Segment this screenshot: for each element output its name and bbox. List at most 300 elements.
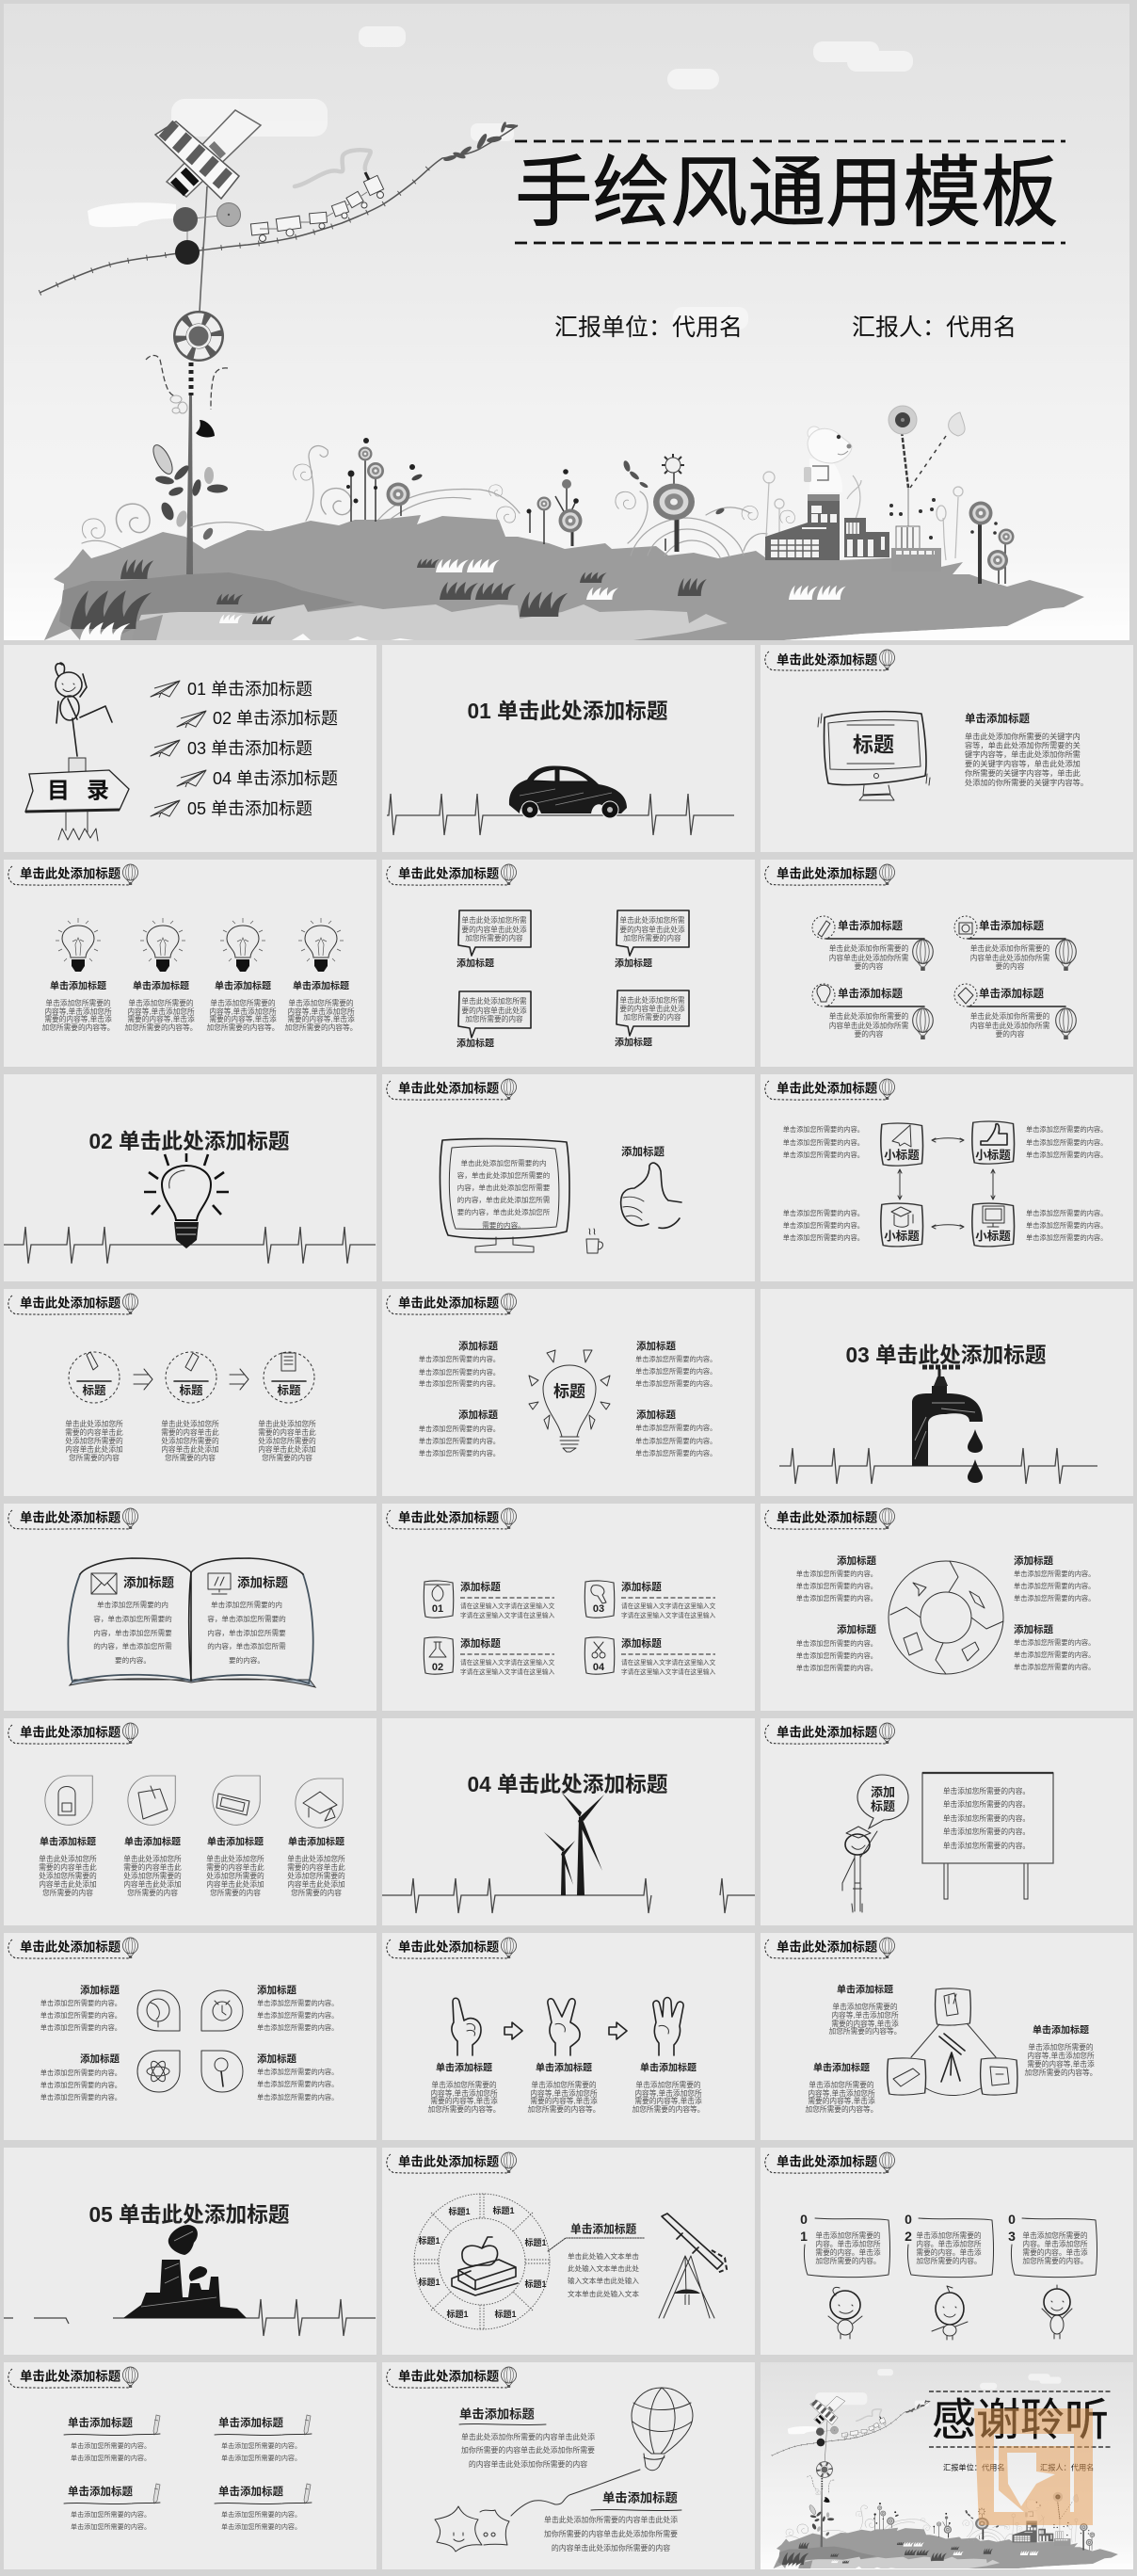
bulb column 4: 单击添加标题 [293, 979, 349, 992]
card: graduation cap: 单击添加您所需要的内容。 [783, 1233, 864, 1241]
item 01: 字请在这里输入文字请在这里输入 [460, 1610, 555, 1619]
top right text: 单击添加您所需要的内容。 [635, 1378, 716, 1388]
slide heading: 单击此处添加标题 [398, 1510, 500, 1525]
item: diamond: 单击添加标题 [979, 987, 1044, 1000]
item: note paper [123, 1776, 182, 1896]
step 1: 处添加您所需要的 [65, 1435, 123, 1444]
item: camera: 单击添加标题 [979, 919, 1044, 932]
item: graduation cap: 处添加您所需要的 [287, 1870, 345, 1879]
item: backpack [39, 1776, 97, 1896]
icon: coffee cup [586, 1229, 602, 1253]
item: pencil: 要的内容 [855, 960, 884, 970]
step 2: 内容单击此处添加 [161, 1444, 219, 1454]
icon: monitor with text: 要的内容，单击此处添加您所 [457, 1207, 551, 1216]
cover title: 手绘风通用模板 [515, 150, 1058, 236]
bulb column 4 [285, 918, 357, 1032]
item: camera: 要的内容 [996, 960, 1025, 970]
notice board: 单击添加您所需要的内容。 [943, 1840, 1030, 1849]
speech box 1: 加您所需要的内容 [465, 932, 523, 942]
left page text: 容，单击添加您所需要的 [93, 1614, 172, 1623]
block top left: 单击添加您所需要的内容。 [71, 2441, 151, 2450]
bulb column 1: 内容等,单击添加您所 [44, 1006, 112, 1015]
icon: bulb with label: 标题 [553, 1382, 585, 1401]
item 02 [424, 1637, 555, 1676]
slide heading: 单击此处添加标题 [777, 1725, 878, 1740]
segment labels: 标题1 [492, 2205, 515, 2215]
body text: 容等，单击此处添加你所需要的关 [965, 740, 1081, 749]
panel: teacher and board [761, 1718, 1133, 1925]
card: monitor: 单击添加您所需要的内容。 [1026, 1233, 1107, 1241]
header badge [765, 2152, 894, 2173]
left page text: 的内容，单击添加您所需 [93, 1640, 172, 1650]
note 3 with kid: 0 [1008, 2212, 1016, 2227]
note 2 with kid [905, 2212, 994, 2340]
block bottom left: 单击添加标题 [68, 2485, 133, 2498]
panel: circular diagram [761, 1504, 1133, 1711]
text block left: 单击添加您所需要的 [809, 2079, 874, 2088]
watermark logo [974, 2408, 1093, 2525]
icon: faucet [912, 1367, 983, 1466]
hand three: 单击添加标题 [640, 2062, 697, 2073]
speech box 3: 添加标题 [456, 1038, 494, 1049]
speech box 4: 要的内容单击此处添 [619, 1004, 685, 1013]
note 1 with kid: 内容。单击添加您所 [815, 2239, 881, 2248]
chart: dotted ring of eight segments [414, 2194, 550, 2329]
note 3 with kid: 单击添加您所需要的 [1022, 2230, 1088, 2239]
item: bulb: 要的内容 [855, 1028, 884, 1038]
panel: numbered cards [382, 1504, 755, 1711]
upper text block: 单击添加标题 [459, 2407, 535, 2422]
top right text: 添加标题 [257, 1984, 296, 1996]
icon: telescope [939, 2034, 965, 2082]
panel: four bulbs [4, 860, 376, 1067]
item 02: 02 [432, 1662, 443, 1673]
icon: apple on books [452, 2237, 518, 2295]
text block top: 需要的内容等,单击添 [831, 2019, 899, 2028]
speech box 3: 单击此处添加您所需 [461, 996, 527, 1006]
item: ruler tag [206, 1776, 264, 1896]
list item 02: 02 单击添加标题 [213, 709, 338, 728]
panel: four circle icons [4, 1933, 376, 2140]
block bottom right [215, 2484, 312, 2531]
note 2 with kid: 2 [905, 2229, 912, 2244]
item: pencil: 内容单击此处添加你所需 [829, 953, 909, 962]
bottom right text: 单击添加您所需要的内容。 [257, 2068, 338, 2075]
item 01: 添加标题 [460, 1581, 501, 1593]
icon: monitor [818, 712, 930, 800]
list item 01: 01 单击添加标题 [187, 680, 312, 699]
lower text block: 单击此处添加你所需要的内容单击此处添 [544, 2514, 678, 2523]
step 3 [258, 1352, 316, 1461]
bottom left text: 单击添加您所需要的内容。 [796, 1638, 877, 1648]
step 3: 单击此处添加您所 [258, 1418, 316, 1427]
header badge [8, 1508, 137, 1529]
header badge [765, 1938, 894, 1958]
bottom right text: 单击添加您所需要的内容。 [257, 2079, 338, 2088]
hand three: 单击添加您所需要的 [635, 2079, 701, 2088]
body text: 你所需要的关键字内容等，单击此 [965, 768, 1081, 778]
note 3 with kid [1008, 2212, 1097, 2339]
speech box 4: 单击此处添加您所需 [619, 994, 685, 1004]
item: pencil: 单击添加标题 [838, 919, 903, 932]
bottom left text: 添加标题 [458, 1409, 498, 1421]
top left text: 单击添加您所需要的内容。 [419, 1367, 500, 1377]
card: paper plane: 小标题 [884, 1148, 920, 1162]
panel: contents slide [4, 645, 376, 852]
header badge [765, 1079, 894, 1100]
panel: balloons list [761, 860, 1133, 1067]
bottom left text: 单击添加您所需要的内容。 [796, 1663, 877, 1672]
item: diamond: 要的内容 [996, 1028, 1025, 1038]
card: book [888, 2058, 926, 2095]
card: binder clips [936, 1988, 970, 2025]
header badge [387, 864, 516, 885]
bottom left text: 单击添加您所需要的内容。 [40, 2068, 121, 2077]
header badge [765, 864, 894, 885]
bottom left text: 添加标题 [837, 1623, 876, 1635]
note 3 with kid: 内容。单击添加您所 [1022, 2239, 1088, 2248]
item: graduation cap [287, 1779, 345, 1896]
reporter: 汇报人：代用名 [1040, 2463, 1094, 2472]
bottom left text: 单击添加您所需要的内容。 [419, 1437, 500, 1444]
icon shape: atom [137, 2051, 180, 2092]
item: note paper: 处添加您所需要的 [123, 1870, 182, 1879]
header badge [765, 650, 894, 670]
segment labels: 标题1 [524, 2237, 547, 2247]
heartbeat line [4, 2299, 376, 2336]
item: bulb: 单击此处添加你所需要的 [829, 1011, 909, 1021]
top left text: 添加标题 [837, 1554, 876, 1567]
right page heading [208, 1573, 288, 1594]
speech box 4 [615, 990, 689, 1049]
top left text: 单击添加您所需要的内容。 [40, 2022, 121, 2032]
note 1 with kid: 0 [800, 2212, 808, 2227]
segment labels: 标题1 [524, 2278, 547, 2289]
note 3 with kid: 加您所需要的内容。 [1022, 2256, 1088, 2265]
speech box 1: 要的内容单击此处添 [461, 925, 527, 934]
item 01 [424, 1581, 555, 1619]
panel: closing slide [761, 2362, 1133, 2569]
text block left: 加您所需要的内容等。 [806, 2103, 877, 2113]
slide heading: 单击此处添加标题 [398, 2369, 500, 2384]
card: monitor: 单击添加您所需要的内容。 [1026, 1209, 1107, 1216]
hand two: 单击添加标题 [536, 2062, 592, 2073]
bulb column 3: 单击添加您所需要的 [210, 998, 276, 1007]
bottom left text: 单击添加您所需要的内容。 [40, 2092, 121, 2101]
step 2: 需要的内容单击此 [161, 1427, 219, 1437]
top right text: 单击添加您所需要的内容。 [257, 2022, 338, 2032]
speech box 3 [456, 991, 531, 1049]
icon: monitor with text: 的内容，单击此处添加您所需 [457, 1194, 551, 1203]
speech box 3: 加您所需要的内容 [465, 1013, 523, 1022]
slide heading: 单击此处添加标题 [398, 2154, 500, 2169]
hand one: 单击添加您所需要的 [431, 2079, 497, 2088]
top right text [635, 1340, 716, 1388]
bottom right text: 添加标题 [636, 1409, 676, 1421]
slide heading: 单击此处添加标题 [398, 1081, 500, 1096]
item: graduation cap: 单击此处添加您所 [287, 1853, 345, 1862]
item 01: 01 [432, 1603, 443, 1615]
item: backpack: 需要的内容单击此 [39, 1862, 97, 1872]
icon: monitor with text: 内容，单击此处添加您所需要 [457, 1183, 551, 1192]
top left text: 单击添加您所需要的内容。 [419, 1354, 500, 1363]
item: diamond [954, 984, 1076, 1039]
list item 03: 03 单击添加标题 [187, 739, 312, 758]
top right text: 单击添加您所需要的内容。 [1014, 1593, 1095, 1602]
hand three [633, 1998, 704, 2113]
arrow 1 [504, 2022, 522, 2039]
block bottom right: 单击添加标题 [218, 2485, 283, 2498]
slide heading: 单击此处添加标题 [20, 1510, 121, 1525]
top left text: 单击添加您所需要的内容。 [40, 1998, 121, 2007]
item: pencil [812, 916, 933, 971]
heartbeat line [382, 1878, 755, 1913]
text block left: 需要的内容等,单击添 [808, 2096, 875, 2105]
note 1 with kid [800, 2212, 890, 2339]
header badge [8, 864, 137, 885]
segment labels: 标题1 [418, 2277, 440, 2287]
section heading: 01 单击此处添加标题 [467, 699, 668, 723]
segment labels: 标题1 [418, 2235, 440, 2246]
top left text: 添加标题 [458, 1340, 498, 1352]
icon shape: alarm clock [201, 1990, 243, 2031]
right page text: 的内容，单击添加您所需 [207, 1640, 286, 1650]
text block top: 单击添加您所需要的 [832, 2002, 898, 2011]
sub heading: 单击添加标题 [965, 712, 1030, 725]
bottom right text: 单击添加您所需要的内容。 [1014, 1650, 1095, 1659]
bulb column 1 [42, 918, 114, 1032]
header badge [387, 1938, 516, 1958]
note 1 with kid: 1 [800, 2229, 808, 2244]
slide heading: 单击此处添加标题 [398, 866, 500, 881]
panel: hot air balloon and stars [382, 2362, 755, 2569]
callout heading: 单击添加标题 [570, 2222, 636, 2235]
hand three: 需要的内容等,单击添 [634, 2096, 702, 2105]
divider bottom [929, 2446, 1112, 2448]
notice board: 单击添加您所需要的内容。 [943, 1827, 1030, 1836]
item: bulb: 单击添加标题 [838, 987, 903, 1000]
card: paper plane [783, 1123, 923, 1166]
panel: section 02 [4, 1074, 376, 1281]
bottom right text [257, 2053, 338, 2101]
bulb column 1: 需要的内容等,单击添 [44, 1013, 112, 1022]
item: graduation cap: 需要的内容单击此 [287, 1862, 345, 1872]
step 1: 您所需要的内容 [69, 1452, 120, 1461]
slide heading: 单击此处添加标题 [777, 1510, 878, 1525]
card: thumb: 单击添加您所需要的内容。 [1026, 1151, 1107, 1158]
item: ruler tag: 处添加您所需要的 [206, 1870, 264, 1879]
step 3: 处添加您所需要的 [258, 1435, 316, 1444]
panel: section 04 [382, 1718, 755, 1925]
icon: smiling stars [435, 2506, 509, 2552]
step 2: 处添加您所需要的 [161, 1435, 219, 1444]
hand one [428, 1998, 500, 2113]
reporting unit: 汇报单位：代用名 [943, 2463, 1005, 2472]
card: graduation cap: 小标题 [884, 1229, 920, 1243]
text block right: 内容等,单击添加您所 [1027, 2051, 1095, 2060]
heartbeat line [4, 1227, 376, 1264]
notice board: 单击添加您所需要的内容。 [943, 1813, 1030, 1823]
icon shape: magnifier [201, 2051, 243, 2092]
icon: open book [68, 1558, 315, 1687]
heartbeat line [779, 1448, 1097, 1484]
bulb column 3: 加您所需要的内容等。 [207, 1022, 279, 1032]
bulb column 4: 内容等,单击添加您所 [287, 1006, 355, 1015]
speech box 3: 要的内容单击此处添 [461, 1006, 527, 1015]
text block right: 单击添加标题 [1033, 2024, 1089, 2036]
item 03: 03 [593, 1603, 604, 1615]
bottom right text: 添加标题 [257, 2053, 296, 2065]
slide heading: 单击此处添加标题 [777, 1081, 878, 1096]
note 2 with kid: 需要的内容。单击添 [916, 2246, 982, 2256]
right page text: 内容，单击添加您所需要 [207, 1627, 286, 1636]
top left text: 添加标题 [80, 1984, 120, 1996]
bottom left text [419, 1409, 500, 1457]
block top right [215, 2415, 312, 2462]
item: backpack: 处添加您所需要的 [39, 1870, 97, 1879]
speech box 2 [615, 910, 689, 970]
item 01: 请在这里输入文字请在这里输入文 [460, 1601, 555, 1610]
item 04: 请在这里输入文字请在这里输入文 [621, 1657, 716, 1666]
item: note paper: 单击添加标题 [124, 1836, 181, 1847]
top left text: 单击添加您所需要的内容。 [796, 1593, 877, 1602]
panel: apple ring [382, 2148, 755, 2355]
note 2 with kid: 单击添加您所需要的 [916, 2230, 982, 2239]
hand two: 单击添加您所需要的 [531, 2079, 597, 2088]
step 1: 标题 [82, 1383, 106, 1397]
slide heading: 单击此处添加标题 [20, 866, 121, 881]
right page heading: 添加标题 [237, 1576, 288, 1589]
card: monitor [972, 1203, 1107, 1247]
note 1 with kid: 单击添加您所需要的 [815, 2230, 881, 2239]
note 2 with kid: 内容。单击添加您所 [916, 2239, 982, 2248]
step 2 [161, 1352, 219, 1461]
note 1 with kid: 加您所需要的内容。 [815, 2256, 881, 2265]
text block top: 加您所需要的内容等。 [829, 2026, 901, 2036]
panel: four linked cards [761, 1074, 1133, 1281]
header badge [8, 2367, 137, 2388]
left page heading [91, 1573, 174, 1594]
icon: stick teacher [842, 1827, 877, 1912]
item: bulb [812, 984, 933, 1039]
bulb column 3 [207, 918, 279, 1032]
speech box 2: 单击此处添加您所需 [619, 915, 685, 925]
callout text: 文本单击此处输入文本 [568, 2288, 639, 2297]
slide heading: 单击此处添加标题 [20, 1940, 121, 1955]
bottom right text [635, 1409, 716, 1457]
block top right: 单击添加您所需要的内容。 [221, 2441, 301, 2450]
block top right: 单击添加您所需要的内容。 [221, 2454, 301, 2462]
top right text: 单击添加您所需要的内容。 [257, 2011, 338, 2019]
icon: stick figure on signpost [25, 663, 129, 841]
arrow 1 [134, 1369, 152, 1390]
slide heading: 单击此处添加标题 [20, 1296, 121, 1311]
bulb column 3: 内容等,单击添加您所 [209, 1006, 277, 1015]
slide heading: 单击此处添加标题 [777, 1940, 878, 1955]
icon: monitor with text: 容，单击此处添加您所需要的 [457, 1169, 551, 1179]
speech box 2: 要的内容单击此处添 [619, 925, 685, 934]
body text: 键字内容等，单击此处添加你所需 [965, 749, 1081, 759]
top left text: 单击添加您所需要的内容。 [796, 1569, 877, 1578]
item: backpack: 内容单击此处添加 [39, 1879, 97, 1889]
upper text block [459, 2407, 595, 2469]
icon: light bulb [144, 1153, 229, 1248]
text block right: 需要的内容等,单击添 [1027, 2058, 1095, 2068]
bulb column 4: 加您所需要的内容等。 [285, 1022, 357, 1032]
header badge [8, 1938, 137, 1958]
hand two [528, 1999, 600, 2113]
step 1: 单击此处添加您所 [65, 1418, 123, 1427]
top right text [257, 1984, 338, 2032]
slide heading: 单击此处添加标题 [777, 866, 878, 881]
bulb column 2: 单击添加标题 [133, 979, 189, 992]
step 2: 单击此处添加您所 [161, 1418, 219, 1427]
item 02: 请在这里输入文字请在这里输入文 [460, 1657, 555, 1666]
item 03: 字请在这里输入文字请在这里输入 [621, 1610, 716, 1619]
top left text: 单击添加您所需要的内容。 [796, 1582, 877, 1589]
speech box 1: 单击此处添加您所需 [461, 915, 527, 925]
card: monitor: 小标题 [975, 1229, 1011, 1243]
item: ruler tag: 您所需要的内容 [210, 1887, 261, 1896]
step 1: 需要的内容单击此 [65, 1427, 123, 1437]
text block left: 内容等,单击添加您所 [808, 2088, 875, 2098]
item: pencil: 单击此处添加你所需要的 [829, 943, 909, 953]
illustration: mini landscape [772, 2369, 1118, 2568]
card: thumb: 小标题 [975, 1148, 1011, 1162]
body text: 处添加的你所需要的关键字内容等。 [965, 778, 1088, 787]
panel: section 05 [4, 2148, 376, 2355]
item: ruler tag: 单击此处添加您所 [206, 1853, 264, 1862]
callout text: 单击此处输入文本单击 [568, 2250, 639, 2260]
speech bubble: 标题 [871, 1798, 895, 1813]
card: thumb: 单击添加您所需要的内容。 [1026, 1137, 1107, 1147]
block bottom right: 单击添加您所需要的内容。 [221, 2510, 301, 2519]
item: camera [954, 916, 1076, 971]
step 3: 标题 [277, 1383, 301, 1397]
top left text [40, 1984, 121, 2032]
hand three: 内容等,单击添加您所 [634, 2088, 702, 2098]
bulb column 2 [125, 918, 197, 1032]
slide heading: 单击此处添加标题 [777, 2154, 878, 2169]
slide heading: 单击此处添加标题 [777, 652, 878, 667]
item: camera: 单击此处添加你所需要的 [970, 943, 1050, 953]
arrow 2 [609, 2022, 627, 2039]
bulb column 3: 需要的内容等,单击添 [209, 1013, 277, 1022]
top left text: 单击添加您所需要的内容。 [40, 2011, 121, 2019]
lower text block: 加你所需要的内容单击此处添加你所需要 [544, 2529, 678, 2538]
panel: four school icons [4, 1718, 376, 1925]
hand one: 加您所需要的内容等。 [428, 2103, 500, 2113]
panel: monitor and thumb [382, 1074, 755, 1281]
bottom left text [40, 2053, 121, 2101]
text block left [806, 2062, 877, 2113]
callout text: 输入文本单击此处输入 [568, 2275, 639, 2284]
block top left: 单击添加标题 [68, 2416, 133, 2429]
panel: open book [4, 1504, 376, 1711]
text block right [1025, 2024, 1097, 2077]
bulb column 3: 单击添加标题 [215, 979, 271, 992]
bulb column 1: 单击添加标题 [50, 979, 106, 992]
icon: water drops [968, 1429, 983, 1483]
panel: three note cards [761, 2148, 1133, 2355]
step 2: 标题 [179, 1383, 203, 1397]
panel: section 03 [761, 1289, 1133, 1496]
item 04: 添加标题 [621, 1637, 662, 1650]
illustration: railway signal and hand-drawn landscape [40, 26, 1129, 640]
step 1 [65, 1352, 123, 1461]
speech bubble [857, 1775, 908, 1828]
item 02: 添加标题 [460, 1637, 501, 1650]
